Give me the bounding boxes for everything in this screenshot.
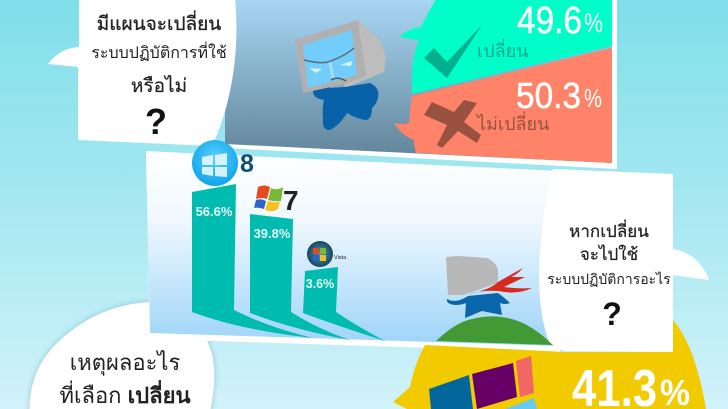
bar: Windows 8 (192, 184, 313, 338)
panel: plan to switch (225, 0, 617, 169)
callout: not switching 50.3%: % (584, 83, 602, 113)
callout: switched 49.6%: % (584, 8, 603, 38)
icon: sad monitor character (295, 20, 386, 130)
callout: switched 49.6%: เปลี่ยน (477, 38, 528, 61)
icon: check mark (424, 25, 482, 78)
callout: question 1: มีแผนจะเปลี่ยน (97, 10, 221, 35)
icon: Windows 8 logo: 8 (240, 150, 254, 178)
callout: not switching 50.3% (394, 48, 612, 163)
icon: Windows 8 logo (192, 140, 254, 186)
icon: cross mark (424, 100, 481, 148)
illustration: monitor hero on hill (436, 256, 553, 345)
bar: Windows 7: 39.8% (254, 226, 291, 241)
bar: Windows Vista: 3.6% (306, 277, 334, 291)
callout: not switching 50.3%: ไม่เปลี่ยน (475, 111, 549, 134)
callout: question 2: หากเปลี่ยน (569, 219, 649, 241)
panel: reason 41.3% (393, 320, 706, 409)
icon: Windows tiles (429, 356, 537, 409)
bar: Windows Vista (303, 267, 385, 341)
icon: Windows 7 logo: 7 (283, 185, 299, 216)
callout: question 3 (30, 302, 214, 409)
callout: question 1: ? (145, 101, 167, 142)
callout: question 1: ระบบปฏิบัติการที่ใช้ (91, 41, 227, 62)
bar: Windows 7 (250, 214, 350, 340)
callout: question 2: จะไปใช้ (580, 244, 638, 264)
callout: switched 49.6% (399, 0, 612, 94)
text: reason question: เหตุผลอะไร (70, 350, 180, 376)
icon: Windows 7 logo (254, 185, 299, 216)
callout: question 2 (539, 169, 709, 352)
callout: not switching 50.3%: 50.3 (516, 75, 581, 116)
icon: Windows Vista logo (307, 241, 347, 267)
text: reason question (59, 350, 191, 408)
icon: Windows Vista logo: Vista (334, 255, 347, 261)
callout: question 2: ? (602, 296, 622, 332)
callout: question 1 (48, 0, 236, 146)
callout: question 2: ระบบปฏิบัติการอะไร (547, 271, 671, 287)
callout: switched 49.6%: 49.6 (517, 0, 582, 42)
text: reason question: ที่เลือก เปลี่ยน (59, 379, 191, 408)
bar: Windows 8: 56.6% (196, 204, 233, 219)
panel: operating system chart (146, 140, 560, 352)
callout: question 1: หรือไม่ (131, 75, 187, 97)
